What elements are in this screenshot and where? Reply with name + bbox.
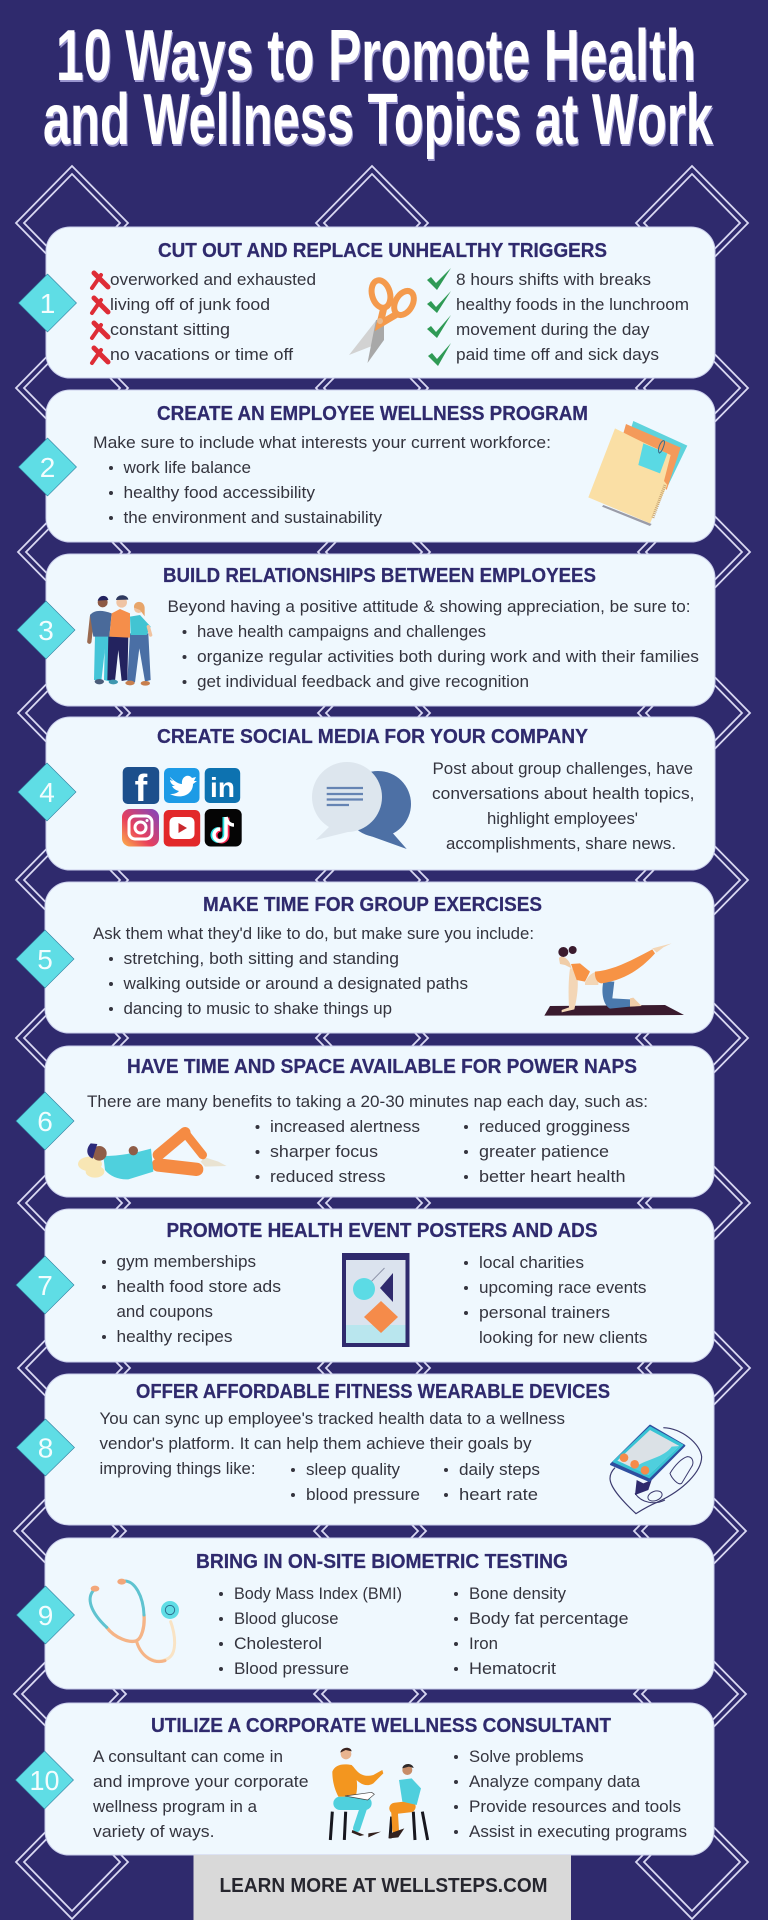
panel: 4 create social media bbox=[18, 717, 715, 870]
number badge 10: 10 bbox=[30, 1765, 60, 1796]
panel: 2 create an employee wellness program bbox=[18, 390, 715, 542]
icon: social media logos bbox=[122, 767, 242, 846]
text block bbox=[432, 759, 694, 853]
text block: Beyond having a positive attitude & showing appreciation, be sure to: bbox=[168, 597, 690, 616]
number badge 3 bbox=[17, 601, 75, 659]
icon: stethoscope bbox=[90, 1579, 179, 1662]
icon: poster bbox=[342, 1253, 410, 1347]
text block: variety of ways. bbox=[93, 1822, 214, 1841]
heading: HAVE TIME AND SPACE AVAILABLE FOR POWER NAPS bbox=[127, 1056, 637, 1078]
bullet list left: Cholesterol bbox=[234, 1634, 322, 1653]
bullet list: sleep quality bbox=[306, 1460, 400, 1479]
call to action bar: LEARN MORE AT WELLSTEPS.COM bbox=[220, 1875, 548, 1897]
bullet list left: Blood glucose bbox=[234, 1609, 338, 1628]
heading: CREATE AN EMPLOYEE WELLNESS PROGRAM bbox=[157, 403, 588, 425]
number badge 8 bbox=[16, 1419, 74, 1476]
bullet list: get individual feedback and give recognition bbox=[197, 672, 529, 691]
list: unhealthy triggers: living off of junk food bbox=[110, 295, 270, 314]
number badge 2: 2 bbox=[40, 452, 55, 483]
panel: 5 make time for group exercises bbox=[16, 882, 714, 1033]
text block: and improve your corporate bbox=[93, 1772, 308, 1791]
heading: UTILIZE A CORPORATE WELLNESS CONSULTANT bbox=[151, 1715, 611, 1737]
bullet list left: sharper focus bbox=[270, 1142, 378, 1161]
bullet list left bbox=[102, 1252, 281, 1346]
number badge 7 bbox=[16, 1256, 74, 1314]
heading: CREATE SOCIAL MEDIA FOR YOUR COMPANY bbox=[157, 726, 589, 748]
bullet list: dancing to music to shake things up bbox=[124, 999, 392, 1018]
bullet list left: health food store ads bbox=[116, 1277, 281, 1296]
list: unhealthy triggers bbox=[110, 270, 316, 364]
bullet list: Provide resources and tools bbox=[469, 1797, 681, 1816]
icon: folder bbox=[588, 421, 687, 526]
bullet list right bbox=[464, 1253, 648, 1347]
bullet list: work life balance bbox=[122, 458, 251, 477]
bullet list: Assist in executing programs bbox=[469, 1822, 687, 1841]
icon: speech bubbles bbox=[312, 762, 411, 849]
heading: BUILD RELATIONSHIPS BETWEEN EMPLOYEES bbox=[163, 565, 596, 587]
list: unhealthy triggers: overworked and exhausted bbox=[110, 270, 316, 289]
number badge 9: 9 bbox=[38, 1600, 53, 1631]
bullet list left bbox=[256, 1117, 420, 1186]
heading: OFFER AFFORDABLE FITNESS WEARABLE DEVICES bbox=[136, 1381, 610, 1403]
number badge 1 bbox=[18, 274, 76, 332]
text block: Ask them what they'd like to do, but make sure you include: bbox=[93, 924, 534, 943]
bullet list bbox=[109, 949, 468, 1018]
list: healthy replacements: paid time off and sick days bbox=[456, 345, 659, 364]
list: healthy replacements: 8 hours shifts with breaks bbox=[456, 270, 651, 289]
bullet list left: gym memberships bbox=[116, 1252, 256, 1271]
list: healthy replacements: movement during the day bbox=[456, 320, 650, 339]
icon: three employees bbox=[89, 595, 151, 686]
icon: person napping bbox=[78, 1133, 227, 1179]
text block: Post about group challenges, have bbox=[432, 759, 693, 778]
bullet list right: Iron bbox=[469, 1634, 498, 1653]
bullet list left: Blood pressure bbox=[234, 1659, 349, 1678]
heading: CUT OUT AND REPLACE UNHEALTHY TRIGGERS bbox=[158, 240, 607, 262]
icon: linkedin: in bbox=[210, 772, 235, 803]
bullet list right: reduced grogginess bbox=[479, 1117, 630, 1136]
list: healthy replacements bbox=[456, 270, 689, 364]
icon: red x marks bbox=[92, 273, 108, 363]
bullet list right bbox=[464, 1117, 630, 1186]
bullet list right bbox=[454, 1584, 628, 1678]
icon: fitness watch bbox=[610, 1426, 702, 1514]
bullet list right: Bone density bbox=[469, 1584, 566, 1603]
bullet list bbox=[109, 458, 382, 527]
bullet list left: healthy recipes bbox=[116, 1327, 232, 1346]
text block: improving things like: bbox=[100, 1459, 256, 1478]
number badge 4: 4 bbox=[39, 777, 55, 808]
number badge 1: 1 bbox=[40, 288, 55, 319]
panel: 6 power naps bbox=[16, 1046, 714, 1197]
bullet list right: upcoming race events bbox=[479, 1278, 646, 1297]
icon: facebook: f bbox=[135, 768, 148, 810]
number badge 2 bbox=[18, 438, 76, 496]
bullet list: heart rate bbox=[459, 1485, 538, 1504]
icon: scissors bbox=[349, 278, 418, 363]
number badge 9 bbox=[16, 1586, 74, 1644]
bullet list right: local charities bbox=[479, 1253, 584, 1272]
heading: PROMOTE HEALTH EVENT POSTERS AND ADS bbox=[166, 1220, 598, 1242]
text block: vendor's platform. It can help them achieve their goals by bbox=[100, 1434, 532, 1453]
icon: woman exercising on mat bbox=[544, 943, 684, 1016]
bullet list right: Hematocrit bbox=[469, 1659, 556, 1678]
text block: You can sync up employee's tracked health data to a wellness bbox=[100, 1409, 565, 1428]
bullet list bbox=[454, 1747, 687, 1841]
bullet list right: greater patience bbox=[479, 1142, 609, 1161]
number badge 10 bbox=[16, 1751, 74, 1809]
bullet list: have health campaigns and challenges bbox=[197, 622, 486, 641]
text block: A consultant can come in bbox=[93, 1747, 283, 1766]
list: healthy replacements: healthy foods in the lunchroom bbox=[456, 295, 689, 314]
text block bbox=[100, 1409, 565, 1478]
bullet list: daily steps bbox=[459, 1460, 540, 1479]
text block: wellness program in a bbox=[92, 1797, 258, 1816]
text block bbox=[92, 1747, 308, 1841]
number badge 7: 7 bbox=[37, 1270, 53, 1301]
heading: BRING IN ON-SITE BIOMETRIC TESTING bbox=[196, 1551, 568, 1573]
number badge 6 bbox=[16, 1092, 74, 1150]
panel: 7 health event posters and ads bbox=[16, 1209, 714, 1362]
call to action bar bbox=[194, 1855, 571, 1920]
list: unhealthy triggers: constant sitting bbox=[110, 320, 230, 339]
icon: youtube bbox=[164, 810, 200, 846]
bullet list right: better heart health bbox=[479, 1167, 626, 1186]
bullet list: healthy food accessibility bbox=[124, 483, 316, 502]
text block: accomplishments, share news. bbox=[446, 834, 676, 853]
heading: MAKE TIME FOR GROUP EXERCISES bbox=[203, 894, 542, 916]
bullet list: blood pressure bbox=[306, 1485, 420, 1504]
bullet list: Solve problems bbox=[469, 1747, 584, 1766]
bullet list bbox=[182, 622, 699, 691]
panel: 9 on-site biometric testing bbox=[16, 1538, 714, 1689]
panel: 10 corporate wellness consultant bbox=[16, 1703, 714, 1855]
bullet list: the environment and sustainability bbox=[124, 508, 382, 527]
title bbox=[43, 16, 714, 160]
number badge 5 bbox=[16, 930, 74, 988]
icon: green check marks bbox=[427, 268, 451, 366]
number badge 8: 8 bbox=[38, 1432, 53, 1464]
bullet list left: reduced stress bbox=[270, 1167, 386, 1186]
icon: twitter bbox=[164, 768, 200, 803]
icon: instagram bbox=[122, 809, 159, 846]
number badge 3: 3 bbox=[38, 615, 54, 646]
panel: 8 fitness wearable devices bbox=[16, 1374, 714, 1525]
icon: consultant and client bbox=[330, 1748, 428, 1840]
text block: There are many benefits to taking a 20-30 minutes nap each day, such as: bbox=[87, 1092, 648, 1111]
bullet list left: Body Mass Index (BMI) bbox=[234, 1584, 402, 1603]
bullet list right: personal trainers bbox=[479, 1303, 610, 1322]
bullet list left: increased alertness bbox=[270, 1117, 420, 1136]
bullet list left bbox=[219, 1584, 402, 1678]
bullet list: walking outside or around a designated paths bbox=[122, 974, 468, 993]
list: unhealthy triggers: no vacations or time off bbox=[110, 345, 293, 364]
bullet list: Analyze company data bbox=[469, 1772, 641, 1791]
bullet list: organize regular activities both during work and with their families bbox=[197, 647, 699, 666]
text block: Make sure to include what interests your current workforce: bbox=[93, 433, 551, 452]
bullet list right: looking for new clients bbox=[479, 1328, 648, 1347]
number badge 6: 6 bbox=[37, 1106, 53, 1137]
bullet list right: Body fat percentage bbox=[469, 1609, 628, 1628]
bullet list bbox=[291, 1460, 540, 1504]
icon: tiktok bbox=[205, 809, 242, 846]
text block: conversations about health topics, bbox=[432, 784, 694, 803]
number badge 4 bbox=[18, 763, 76, 821]
number badge 5: 5 bbox=[37, 944, 53, 975]
panel: 3 build relationships between employees bbox=[17, 554, 715, 706]
panel: 1 cut out and replace unhealthy triggers bbox=[18, 227, 715, 378]
bullet list: stretching, both sitting and standing bbox=[124, 949, 399, 968]
text block: highlight employees' bbox=[487, 809, 638, 828]
bullet list left: and coupons bbox=[116, 1302, 213, 1321]
